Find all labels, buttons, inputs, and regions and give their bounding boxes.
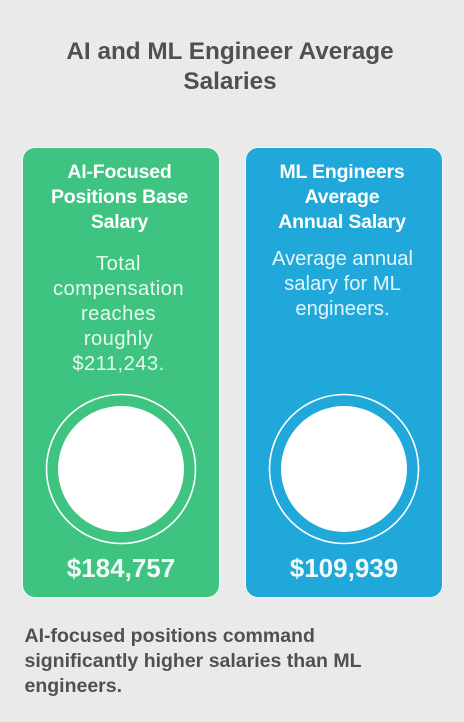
icon: ring and circle [268, 394, 420, 544]
title [66, 38, 394, 95]
value: AI salary: $184,757 [67, 552, 175, 582]
text: total compensation: compensation [53, 278, 184, 300]
text: total compensation: Total [96, 252, 141, 274]
heading: ML engineers: ML Engineers [279, 160, 405, 182]
takeaway text: engineers. [24, 675, 122, 697]
title: Salaries [183, 68, 277, 95]
title: AI and ML Engineer Average [66, 38, 394, 65]
takeaway text [24, 625, 362, 697]
heading: ML engineers: Average [305, 186, 379, 208]
text: average annual salary: salary for ML [284, 273, 401, 295]
text: total compensation: $211,243. [72, 352, 165, 374]
text: average annual salary: Average annual [272, 248, 413, 270]
takeaway text: significantly higher salaries than ML [24, 650, 362, 672]
panel: ML engineers [245, 147, 443, 598]
heading: ML engineers [278, 160, 406, 232]
heading: AI-focused: Positions Base [51, 186, 188, 208]
text: average annual salary: engineers. [295, 298, 390, 320]
heading: AI-focused [51, 160, 188, 232]
takeaway text: AI-focused positions command [24, 625, 315, 647]
icon: ring and circle [46, 394, 196, 544]
heading: AI-focused: Salary [91, 210, 148, 232]
heading: AI-focused: AI-Focused [67, 160, 172, 182]
panel: AI-focused positions [22, 147, 220, 598]
text: average annual salary [272, 248, 413, 320]
text: total compensation: reaches [81, 302, 156, 324]
heading: ML engineers: Annual Salary [278, 210, 406, 232]
text: total compensation: roughly [84, 328, 153, 350]
text: total compensation [53, 252, 184, 374]
value: ML salary: $109,939 [290, 552, 398, 582]
